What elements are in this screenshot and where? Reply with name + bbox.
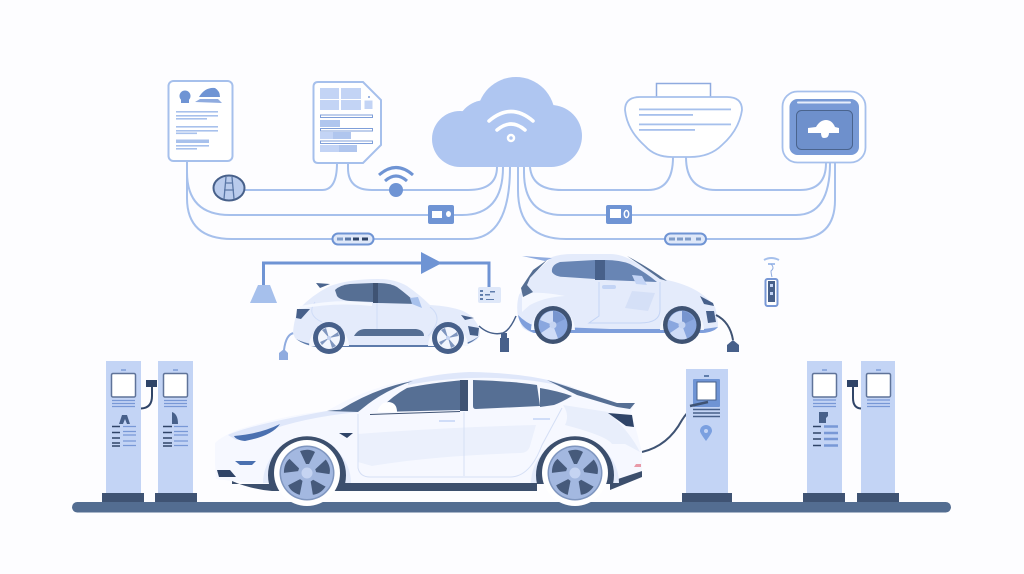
icon: small control box bbox=[478, 287, 501, 303]
ground bar bbox=[72, 502, 951, 512]
icon: location pin bbox=[700, 425, 712, 441]
door handle bar bbox=[354, 329, 424, 336]
readout rows bbox=[163, 426, 172, 446]
tail light bbox=[608, 413, 634, 427]
charging station 5 bbox=[857, 361, 899, 502]
underside bbox=[232, 471, 642, 491]
icon: document logos bbox=[180, 88, 222, 103]
car: blue-wheel compact bbox=[517, 254, 739, 352]
wheel arch halos bbox=[263, 439, 619, 483]
plug and cable: right pair bbox=[847, 380, 861, 408]
icon bbox=[119, 415, 130, 424]
card text lines bbox=[639, 108, 731, 131]
readout rows bbox=[112, 426, 120, 446]
charging station 1 bbox=[102, 361, 144, 502]
icon bbox=[172, 412, 178, 424]
car body bbox=[293, 279, 480, 346]
wheels bbox=[274, 440, 340, 506]
document: left report bbox=[168, 81, 232, 161]
badge: right module bbox=[606, 205, 632, 224]
mirror bbox=[377, 402, 397, 412]
icon: remote sensor bbox=[764, 258, 779, 306]
charging station 4 bbox=[803, 361, 845, 502]
icon: tower badge bbox=[214, 176, 244, 200]
connector lines bbox=[187, 157, 835, 239]
wheel arches bbox=[268, 436, 614, 484]
wheels bbox=[534, 306, 572, 344]
body shell bbox=[215, 372, 642, 484]
charging cable rear bbox=[284, 333, 294, 350]
spoiler and rear strip bbox=[522, 256, 552, 261]
rear quarter shading bbox=[563, 405, 640, 452]
screen bbox=[164, 374, 188, 397]
charging cable bbox=[716, 315, 733, 340]
charge cable bbox=[642, 402, 708, 452]
windows bbox=[335, 283, 373, 302]
car body bbox=[517, 254, 718, 333]
panel: printer-shaped message card bbox=[625, 84, 742, 157]
screen bbox=[866, 374, 890, 397]
door handles bbox=[439, 419, 550, 421]
charging station 2 bbox=[155, 361, 197, 502]
charging station 3 with pin bbox=[682, 369, 732, 502]
screen bbox=[693, 379, 720, 407]
wheel arches bbox=[531, 308, 704, 330]
badge: right connector pill bbox=[665, 234, 706, 244]
car: small hatchback bbox=[279, 279, 516, 360]
cloud wifi symbol bbox=[489, 112, 533, 141]
icon: car glyph bbox=[808, 120, 839, 138]
document text lines bbox=[176, 111, 218, 150]
screen bbox=[812, 374, 836, 397]
windows bbox=[552, 260, 595, 279]
windows bbox=[377, 380, 465, 412]
sheet table blocks bbox=[320, 88, 372, 152]
wheels bbox=[313, 322, 345, 354]
sheet rule bars bbox=[320, 115, 372, 144]
icon: wifi signal bbox=[379, 168, 413, 197]
panel: vehicle display device bbox=[782, 92, 866, 162]
readout rows bbox=[813, 426, 821, 446]
charging cable front bbox=[479, 316, 516, 334]
icon: cone source bbox=[250, 285, 277, 303]
roof and rear strips bbox=[327, 381, 413, 412]
hood highlight bbox=[228, 411, 358, 440]
document: data sheet bbox=[314, 82, 381, 163]
icon bbox=[819, 412, 828, 423]
front details bbox=[235, 461, 256, 465]
badge: left module bbox=[428, 205, 454, 224]
arrow: flow to next vehicle bbox=[250, 252, 489, 303]
plug and cable: left pair bbox=[141, 380, 157, 408]
headlight bbox=[234, 424, 280, 441]
door panel shading bbox=[358, 425, 536, 466]
car: main sedan bbox=[215, 372, 708, 506]
badge: left connector pill bbox=[332, 234, 374, 244]
icon: cloud with wifi bbox=[432, 77, 582, 167]
lamps bbox=[700, 296, 716, 323]
roof highlight bbox=[408, 372, 575, 388]
wheel arches bbox=[309, 326, 468, 346]
screen bbox=[112, 374, 136, 397]
